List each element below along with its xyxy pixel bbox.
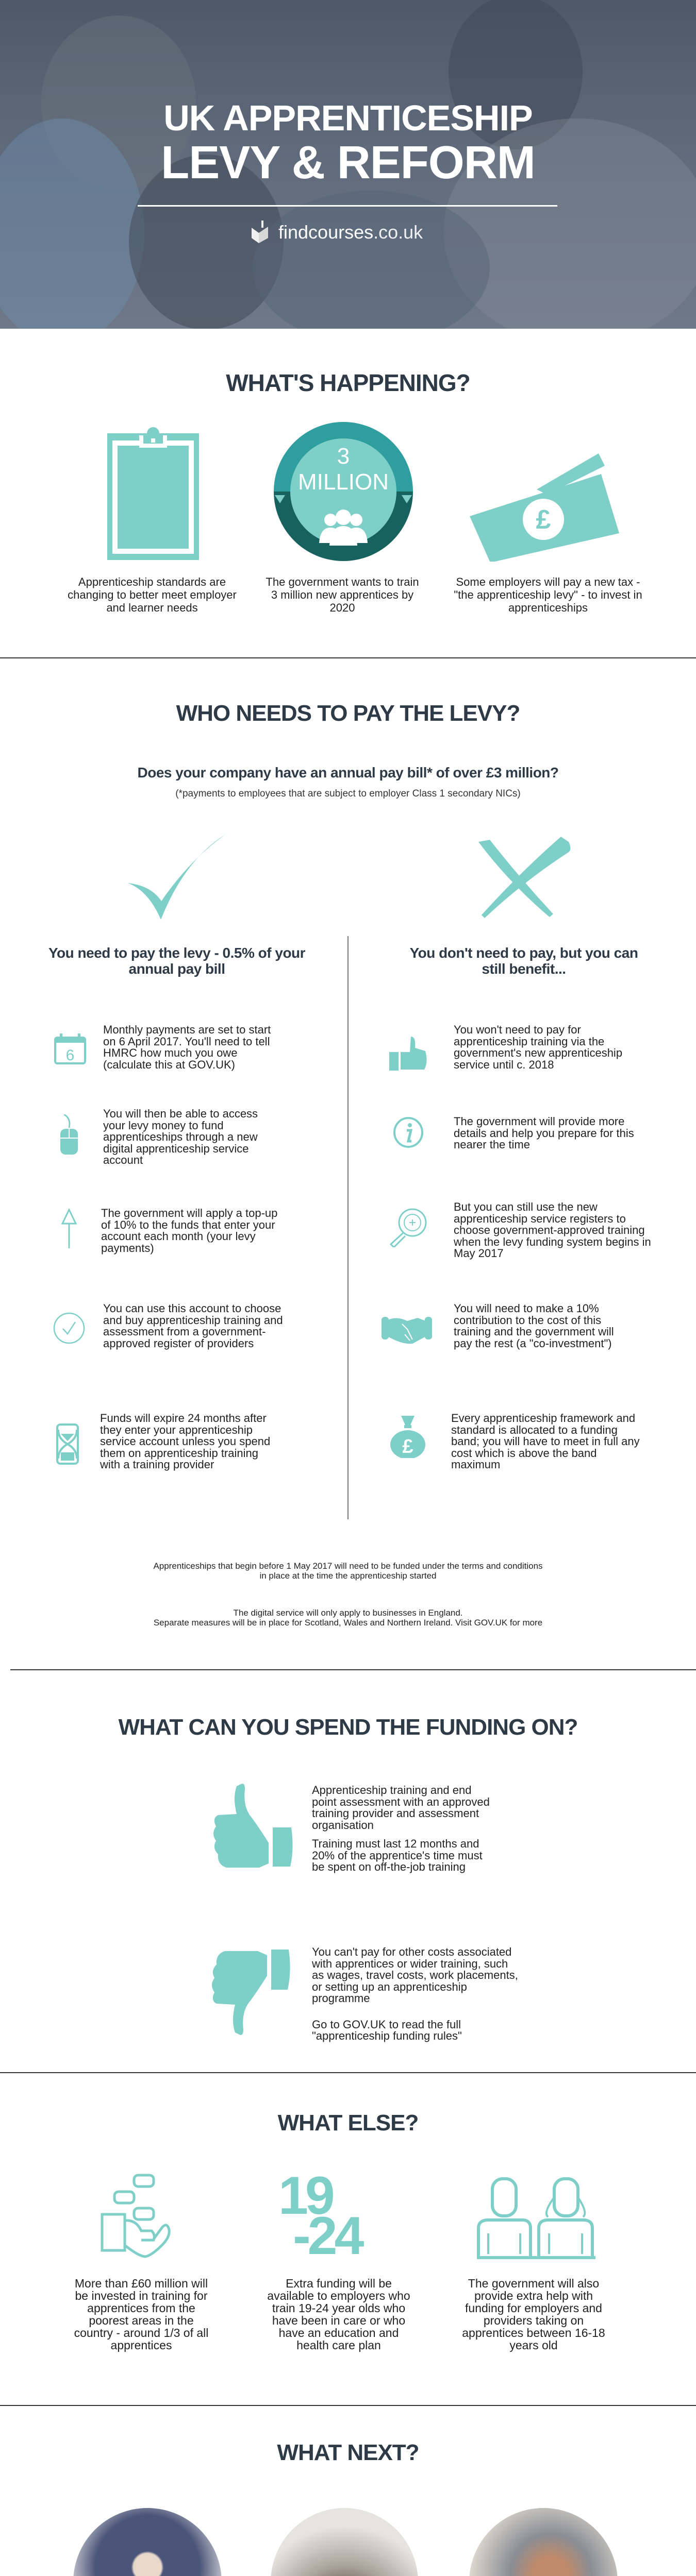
text: funds expire: Funds will expire 24 months after they enter your apprenticeship service account unless you spend them on apprenticeship training with a training provider bbox=[100, 1412, 270, 1471]
decorative photo silhouettes bbox=[0, 0, 696, 329]
text: extra funding 19-24: Extra funding will be available to employers who train 19-24 year olds who have been in care or who have an education and health care plan bbox=[267, 2277, 410, 2352]
text: monthly payments: Monthly payments are set to start on 6 April 2017. You'll need to tell HMRC how much you owe (calculate this at GOV.UK) bbox=[103, 1023, 271, 1071]
text: what you can spend on: Training must last 12 months and 20% of the apprentice's time must be spent on off-the-job training bbox=[312, 1837, 483, 1873]
text: top-up: The government will apply a top-up of 10% to the funds that enter your account each month (your levy payments) bbox=[101, 1207, 277, 1254]
note: before May 2017: Apprenticeships that begin before 1 May 2017 will need to be funded under the terms and conditions bbox=[153, 1561, 543, 1571]
icon: clipboard bbox=[107, 427, 199, 560]
note: before May 2017: in place at the time the apprenticeship started bbox=[259, 1571, 437, 1581]
icon: 19-24 bbox=[278, 2166, 364, 2266]
note: England only: Separate measures will be in place for Scotland, Wales and Northern Ireland. Visit GOV.UK for more bbox=[154, 1618, 542, 1628]
photo: learners bbox=[469, 2508, 618, 2576]
icon: banknote: £ bbox=[536, 505, 551, 535]
icon: hourglass bbox=[56, 1423, 79, 1465]
text: 10% contribution: You will need to make a 10% contribution to the cost of this training and the government will pay the rest (a "co-investment") bbox=[454, 1302, 614, 1350]
column heading: pay: You need to pay the levy - 0.5% of your annual pay bill bbox=[48, 945, 305, 977]
heading: what else: WHAT ELSE? bbox=[278, 2110, 418, 2136]
heading: what's happening: WHAT'S HAPPENING? bbox=[226, 369, 470, 396]
icon: banknote bbox=[470, 453, 619, 562]
icon: info bbox=[393, 1117, 423, 1148]
icon: up arrow bbox=[61, 1208, 77, 1248]
icon: 3 million badge bbox=[274, 422, 413, 561]
icon: 19-24: 19 bbox=[278, 2166, 332, 2226]
text: can't pay for: Go to GOV.UK to read the full "apprenticeship funding rules" bbox=[312, 2018, 462, 2042]
icon: calendar bbox=[54, 1033, 86, 1064]
icon: calendar: 6 bbox=[66, 1047, 74, 1064]
icon: hand with coins bbox=[101, 2174, 171, 2258]
title bbox=[161, 98, 535, 189]
text: access levy money: You will then be able to access your levy money to fund apprenticeships through a new digital apprenticeship service account bbox=[103, 1107, 258, 1166]
note: before May 2017 bbox=[153, 1561, 543, 1581]
text: 16-18: The government will also provide extra help with funding for employers and providers taking on apprentices between 16-18 years old bbox=[462, 2277, 605, 2352]
icon: money bag: £ bbox=[402, 1436, 413, 1458]
text: £60 million: More than £60 million will be invested in training for apprentices from the poorest areas in the country - around 1/3 of all apprentices bbox=[74, 2277, 208, 2352]
note: England only bbox=[154, 1608, 542, 1628]
text: provide more details: The government will provide more details and help you prepare for this nearer the time bbox=[454, 1115, 634, 1151]
icon: cross bbox=[478, 837, 570, 918]
title: LEVY & REFORM bbox=[161, 137, 535, 189]
column heading: don't pay: You don't need to pay, but you can still benefit... bbox=[410, 945, 638, 977]
icon: handshake bbox=[382, 1317, 432, 1344]
icon: 19-24: -24 bbox=[293, 2206, 361, 2266]
icon: thumbs down large bbox=[212, 1950, 290, 2035]
heading: who needs to pay: WHO NEEDS TO PAY THE LEVY? bbox=[176, 701, 520, 726]
heading: what next: WHAT NEXT? bbox=[277, 2440, 419, 2465]
note: England only: The digital service will only apply to businesses in England. bbox=[233, 1608, 463, 1618]
photo: training providers bbox=[271, 2508, 418, 2576]
text: 3 million: The government wants to train 3 million new apprentices by 2020 bbox=[266, 575, 419, 614]
icon: thumbs up large bbox=[213, 1784, 293, 1868]
text: what you can spend on bbox=[312, 1784, 490, 1873]
icon: check mark bbox=[128, 835, 225, 920]
text: what you can spend on: Apprenticeship training and end point assessment with an approved training provider and assessment organisation bbox=[312, 1784, 490, 1831]
text: can't pay for: You can't pay for other costs associated with apprentices or wider training, such as wages, travel costs, work placements, or setting up an apprenticeship programme bbox=[312, 1945, 518, 2005]
header: photo banner bbox=[0, 0, 696, 329]
text: (*payments to employees that are subject to employer Class 1 secondary NICs) bbox=[175, 788, 521, 799]
icon: two people bbox=[477, 2177, 595, 2259]
heading: what can you spend: WHAT CAN YOU SPEND THE FUNDING ON? bbox=[119, 1715, 577, 1740]
icon: magnifier bbox=[390, 1209, 427, 1247]
icon: 3 million badge: 3 bbox=[337, 444, 350, 469]
icon: money bag bbox=[390, 1416, 425, 1458]
text: standards: Apprenticeship standards are changing to better meet employer and learner needs bbox=[68, 575, 237, 614]
icon: 3 million badge: MILLION bbox=[298, 469, 389, 495]
text: choose and buy: You can use this account to choose and buy apprenticeship training and assessment from a government-approved register of providers bbox=[103, 1302, 283, 1350]
text: won't need to pay: You won't need to pay for apprenticeship training via the government's new apprenticeship service until c. 2018 bbox=[454, 1023, 622, 1071]
text: registers: But you can still use the new apprenticeship service registers to choose government-approved training when the levy funding system begins in May 2017 bbox=[454, 1200, 651, 1260]
text: levy: Some employers will pay a new tax - "the apprenticeship levy" - to invest in apprenticeships bbox=[454, 575, 642, 614]
text: funding band: Every apprenticeship framework and standard is allocated to a funding band; you will have to meet in full any cost which is above the band maximum bbox=[451, 1412, 640, 1471]
question: Does your company have an annual pay bill* of over £3 million? bbox=[137, 765, 559, 781]
photo: employers bbox=[73, 2508, 222, 2576]
icon: thumbs up small bbox=[389, 1037, 427, 1071]
logo: findcourses.co.uk bbox=[278, 222, 423, 243]
title: UK APPRENTICESHIP bbox=[163, 98, 533, 138]
icon: mouse bbox=[60, 1114, 78, 1155]
text: can't pay for bbox=[312, 1945, 518, 2042]
icon: check circle bbox=[54, 1313, 85, 1344]
